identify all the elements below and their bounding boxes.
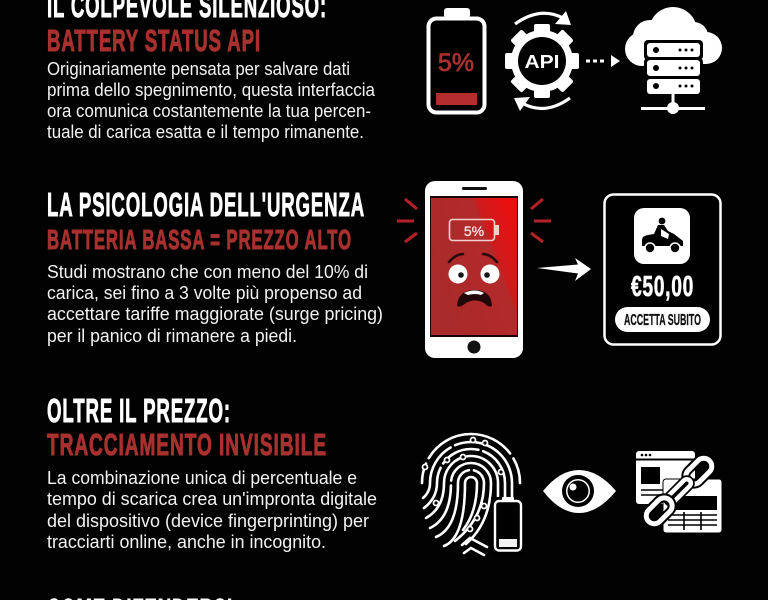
panel: section 1 text	[47, 0, 376, 142]
text block: section 3 body	[47, 467, 377, 552]
icon: cloud server	[625, 7, 722, 114]
text block: section 3 body: tempo di scarica crea un'impronta digitale	[47, 488, 377, 509]
icon: fingerprint with battery	[422, 434, 524, 555]
arrow: phone to price card	[537, 258, 591, 281]
text block: section 1 body: prima dello spegnimento, questa interfaccia	[47, 79, 376, 100]
text block: section 3 body: La combinazione unica di percentuale e	[47, 467, 357, 488]
text block: section 3 body: del dispositivo (device fingerprinting) per	[47, 510, 369, 531]
heading: la psicologia dell'urgenza: LA PSICOLOGIA DELL'URGENZA	[47, 186, 365, 223]
text block: section 1 body: ora comunica costantemente la tua percen-	[47, 100, 371, 121]
heading: oltre il prezzo: OLTRE IL PREZZO:	[47, 392, 231, 429]
icon: linked browser windows	[636, 451, 722, 533]
text block: section 2 body: accettare tariffe maggiorate (surge pricing)	[47, 303, 383, 324]
panel: ride price card	[604, 194, 720, 344]
icon: api gear with rotating arrows: API	[524, 52, 560, 72]
text block: section 1 body: Originariamente pensata per salvare dati	[47, 58, 350, 79]
icon: battery at 5%: 5%	[438, 49, 474, 77]
arrow: dotted to cloud	[586, 55, 620, 67]
text block: section 2 body	[47, 261, 383, 346]
subheading: batteria bassa prezzo alto: BATTERIA BASSA = PREZZO ALTO	[47, 224, 352, 255]
text block: section 2 body: per il panico di rimanere a piedi.	[47, 325, 297, 346]
text block: section 1 body: tuale di carica esatta e il tempo rimanente.	[47, 121, 364, 142]
button: accetta subito: ACCETTA SUBITO	[624, 312, 701, 329]
icon: api gear with rotating arrows	[505, 11, 579, 111]
panel: section 2 text	[47, 186, 383, 346]
subheading: battery status api: BATTERY STATUS API	[47, 23, 261, 58]
text block: section 1 body	[47, 58, 376, 142]
icon: alarm lines around phone	[397, 199, 551, 242]
button: accetta subito	[615, 307, 710, 332]
icon: scared phone: 5%	[464, 223, 484, 239]
subheading: tracciamento invisibile: TRACCIAMENTO INVISIBILE	[47, 427, 327, 462]
icon: eye	[543, 470, 616, 513]
icon: battery at 5%	[428, 8, 484, 112]
icon: car app	[634, 208, 690, 264]
text block: section 2 body: carica, sei fino a 3 volte più propenso ad	[47, 282, 362, 303]
price: €50,00	[631, 271, 694, 303]
icon: scared phone	[425, 181, 523, 358]
text block: section 3 body: tracciarti online, anche in incognito.	[47, 531, 326, 552]
panel: section 3 text	[47, 392, 377, 552]
text block: section 2 body: Studi mostrano che con meno del 10% di	[47, 261, 368, 282]
